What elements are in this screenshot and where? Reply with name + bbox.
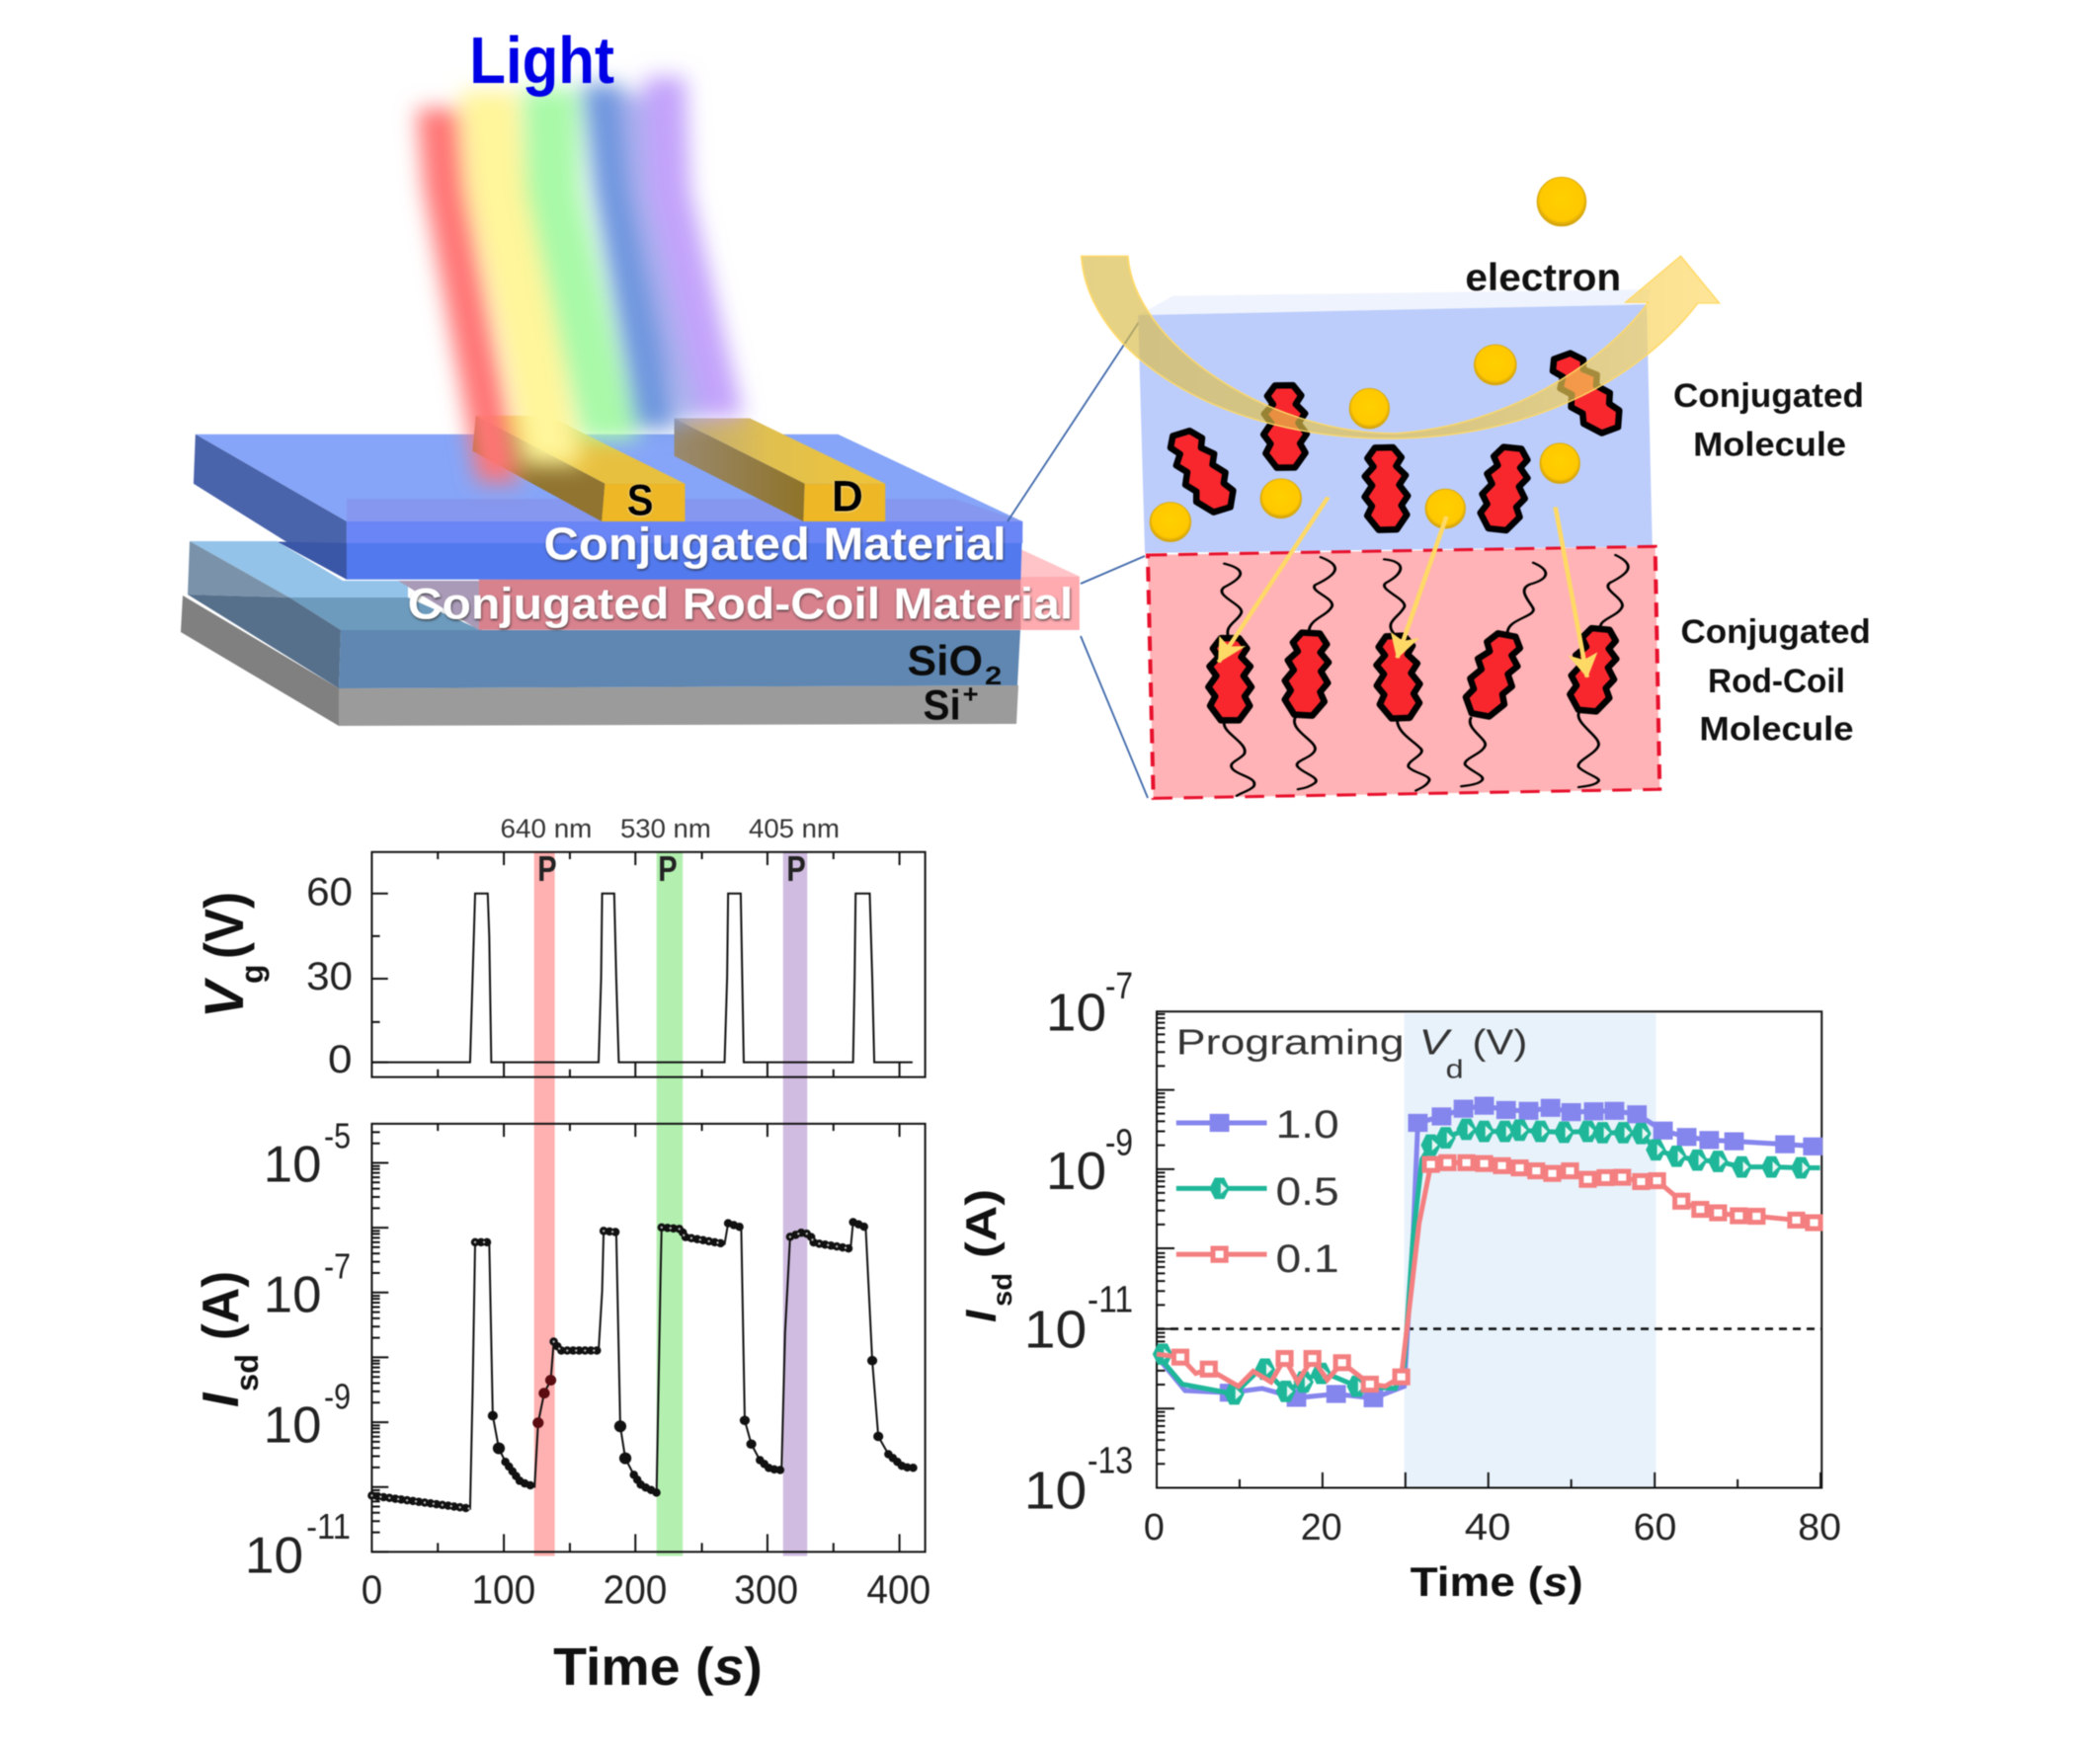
panel: device labels: [408, 25, 1073, 729]
wavelength labels: 530 nm: [620, 815, 711, 843]
y-axis title: Isd (A) right chart: I: [957, 1310, 1006, 1322]
panel: right chart, programming Vd: [1024, 964, 1841, 1605]
label: Conjugated Molecule: Conjugated: [1673, 377, 1864, 415]
axis numbers: -7: [324, 1247, 351, 1287]
axis numbers: 10: [264, 1397, 321, 1454]
axis numbers: 10: [264, 1137, 321, 1194]
rod-coil molecules with wavy tails: [1208, 555, 1628, 796]
axis numbers: 10: [1046, 1141, 1106, 1201]
label: Conjugated Molecule: Molecule: [1693, 427, 1846, 463]
y-axis title: Vg (V): g: [234, 964, 270, 984]
axis numbers: -11: [306, 1508, 351, 1548]
chart: Vg gate pulses: 0: [328, 1037, 353, 1080]
label: Si+: +: [963, 681, 979, 709]
axis numbers: -5: [324, 1117, 351, 1156]
plot frame and ticks: [1157, 1011, 1821, 1487]
legend: [1176, 1022, 1527, 1281]
heading: Light: Light: [469, 25, 614, 98]
label: Si+: Si: [923, 682, 961, 729]
axis numbers: 10: [245, 1528, 303, 1584]
legend: V: [1419, 1022, 1452, 1063]
axis numbers: -7: [1105, 964, 1133, 1006]
conjugated material layer: [194, 435, 1022, 580]
axis numbers: -11: [1088, 1278, 1133, 1320]
series 0.5 V: [1153, 1119, 1819, 1404]
y-axis title: Isd (A): I: [193, 1392, 250, 1407]
y-axis title: Isd (A): (A): [193, 1271, 250, 1340]
x-axis title: Time (s): Time ( s): [553, 1637, 763, 1697]
programming window shading: [1405, 1013, 1656, 1487]
axis numbers: 100: [471, 1568, 535, 1613]
label: D: D: [832, 471, 863, 520]
electron transfer arrows: [1219, 497, 1587, 677]
axis numbers: 10: [264, 1267, 321, 1323]
axis numbers: -13: [1088, 1438, 1133, 1481]
axis numbers: 200: [604, 1568, 667, 1613]
y-axis title: Isd (A) right chart: [957, 1189, 1017, 1322]
series 0.1 V: [1157, 1156, 1820, 1391]
label: Conjugated Rod-Coil Molecule: Conjugated: [1680, 613, 1871, 651]
conjugated molecule block: [1138, 289, 1653, 553]
wavelength labels: [501, 815, 840, 843]
source electrode: [472, 416, 685, 521]
conjugated molecules: [1162, 349, 1629, 531]
axis numbers: 80: [1798, 1505, 1841, 1548]
axis numbers: [245, 1117, 930, 1613]
y-axis title: Isd (A): [193, 1271, 265, 1407]
axis numbers: -9: [324, 1378, 351, 1417]
axis numbers: [1024, 964, 1841, 1548]
program markers P: P: [658, 850, 678, 890]
wavelength labels: 640 nm: [501, 815, 592, 843]
axis numbers: 300: [734, 1568, 798, 1613]
axis numbers: 10: [1024, 1460, 1087, 1520]
legend: 0.5: [1276, 1170, 1339, 1214]
curved electron flow arrow: [1082, 256, 1720, 438]
drain electrode: [675, 418, 885, 521]
label: SiO2: SiO: [908, 638, 983, 684]
S electrode face (above beam): [602, 484, 685, 521]
conjugated rod-coil layer: [479, 549, 1081, 630]
y-axis title: Vg (V): (V): [193, 892, 255, 959]
label: Conjugated Rod-Coil Molecule: Molecule: [1699, 711, 1854, 748]
chart: Vg gate pulses: [306, 852, 926, 1080]
electrons: [1150, 177, 1586, 542]
label: Conjugated Rod-Coil Molecule: [1680, 613, 1871, 748]
light beams: [417, 77, 744, 482]
chart: Isd photo-response: [245, 1117, 930, 1613]
wavelength labels: 405 nm: [749, 815, 840, 843]
y-axis title: Vg (V): V: [193, 977, 255, 1018]
label: Conjugated Rod-Coil Molecule: Rod-Coil: [1708, 663, 1845, 699]
legend: Programing: [1176, 1022, 1405, 1063]
label: S: S: [627, 475, 654, 524]
chart: Vg gate pulses: 30: [306, 954, 353, 997]
axis numbers: 0: [1144, 1505, 1165, 1548]
axis numbers: 10: [1024, 1300, 1087, 1359]
axis numbers: 20: [1301, 1505, 1342, 1548]
SiO2 dielectric layer: [188, 541, 1020, 688]
y-axis title: Isd (A) right chart: (A): [957, 1189, 1006, 1258]
y-axis title: Isd (A) right chart: sd: [987, 1273, 1017, 1307]
panel: molecular zoom view: [1082, 177, 1871, 798]
marker highlights: [371, 1228, 850, 1509]
program markers P: P: [537, 850, 557, 890]
panel: transistor device schematic: [194, 416, 1081, 630]
panel: left charts, Vg and Isd versus time: [245, 815, 930, 1697]
label: Conjugated Material: Conjugated Material: [544, 519, 1007, 570]
chart: Vg gate pulses: 60: [306, 870, 353, 914]
axis numbers: 40: [1465, 1505, 1511, 1548]
label: Conjugated Molecule: [1673, 377, 1864, 463]
connector lines from device to zoomed view: [1008, 313, 1148, 798]
legend: 0.1: [1276, 1236, 1339, 1281]
label: SiO2: 2: [985, 663, 1002, 690]
axis numbers: 0: [362, 1568, 382, 1613]
axis numbers: 400: [866, 1568, 930, 1613]
y-axis title: Vg (V): [193, 892, 270, 1018]
program markers P: P: [786, 850, 806, 890]
program markers P: [537, 850, 806, 890]
data markers: [371, 1222, 914, 1509]
legend: (V): [1473, 1022, 1527, 1063]
Si substrate layer: [181, 596, 1018, 726]
large data points: [488, 1356, 883, 1465]
y-axis title: Isd (A): sd: [229, 1354, 265, 1392]
axis numbers: -9: [1105, 1121, 1133, 1163]
rod-coil molecule block: [1148, 546, 1659, 798]
light pulse bands: [534, 852, 807, 1556]
label: electron: electron: [1465, 256, 1621, 299]
axis numbers: 10: [1046, 983, 1106, 1042]
threshold dashed line: [1157, 1327, 1821, 1330]
label: Conjugated Rod-Coil Material: Conjugated Rod-Coil Material: [408, 579, 1073, 628]
legend: d: [1446, 1055, 1464, 1083]
axis numbers: 60: [1634, 1505, 1676, 1548]
legend: 1.0: [1276, 1103, 1339, 1147]
series 1.0 V: [1157, 1097, 1822, 1407]
x-axis title: Time (s): Time (s): [1411, 1558, 1583, 1605]
